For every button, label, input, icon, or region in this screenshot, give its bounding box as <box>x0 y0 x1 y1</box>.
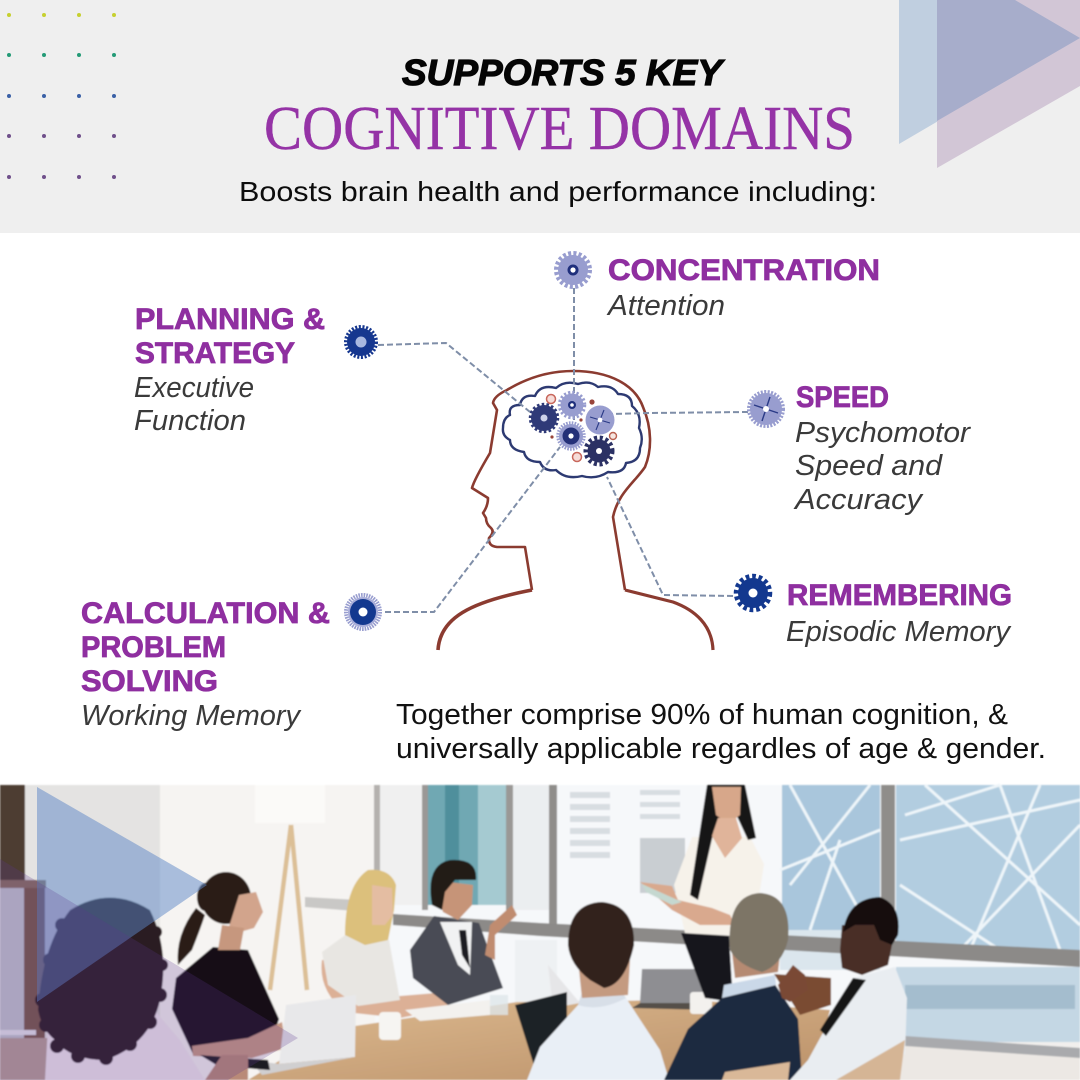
distant building windows <box>570 790 680 858</box>
man right: white shirt, tie <box>722 897 907 1080</box>
gear: speed <box>749 392 783 426</box>
summary text: universally applicable regardles of age & gender. <box>396 733 1046 765</box>
label: planning and strategy <box>134 303 325 437</box>
label: speed: Accuracy <box>793 484 924 516</box>
overlay triangle: purple <box>0 859 298 1080</box>
summary text <box>396 699 1046 765</box>
photo: business meeting <box>0 785 1080 1080</box>
label: speed <box>793 381 971 516</box>
brain gears <box>530 392 616 464</box>
woman two: black top <box>172 872 286 1058</box>
label: speed: SPEED <box>796 381 889 414</box>
woman one: curly hair <box>35 898 248 1080</box>
label: calculation and problem solving: PROBLEM <box>81 631 226 664</box>
window glass <box>375 785 1080 1025</box>
heading: supports 5 key: SUPPORTS 5 KEY <box>402 52 725 93</box>
man gray hair: navy jacket <box>664 893 802 1080</box>
lamp <box>255 785 325 823</box>
label: planning and strategy: Function <box>134 405 246 437</box>
label: speed: Speed and <box>795 450 943 482</box>
label: planning and strategy: Executive <box>134 372 254 404</box>
mullions <box>374 785 895 950</box>
label: concentration: CONCENTRATION <box>608 254 880 287</box>
label: concentration <box>606 254 880 322</box>
gear: remembering <box>736 576 770 610</box>
header panel <box>0 0 1080 233</box>
label: remembering: REMEMBERING <box>787 579 1012 612</box>
brain outline <box>503 383 642 477</box>
summary text: Together comprise 90% of human cognition, & <box>396 699 1008 731</box>
man back: white shirt <box>527 902 669 1080</box>
label: planning and strategy: STRATEGY <box>135 337 295 370</box>
label: calculation and problem solving <box>81 597 330 732</box>
glass facade lines <box>780 785 1080 950</box>
corner triangles <box>899 0 1080 168</box>
panel: head diagram <box>346 254 783 650</box>
gear: concentration <box>556 254 590 286</box>
overlay triangle: blue <box>37 787 207 1002</box>
table <box>248 1000 830 1080</box>
woman three: blonde <box>321 870 450 1018</box>
head outline <box>438 371 713 650</box>
label: speed: Psychomotor <box>795 417 971 449</box>
label: calculation and problem solving: CALCULATION & <box>81 597 330 630</box>
chair <box>774 974 831 1015</box>
label: calculation and problem solving: Working Memory <box>81 700 301 732</box>
man one: suit <box>410 860 517 1005</box>
table items: mug, laptop and papers <box>200 969 712 1075</box>
title: cognitive domains: COGNITIVE DOMAINS <box>264 95 855 163</box>
gear: planning <box>346 327 376 357</box>
dashed connectors <box>378 288 748 612</box>
presenter <box>640 785 764 1002</box>
gear: calculation <box>346 595 380 629</box>
label: calculation and problem solving: SOLVING <box>81 665 218 698</box>
label: planning and strategy: PLANNING & <box>135 303 325 336</box>
label: remembering <box>786 579 1012 648</box>
label: concentration: Attention <box>606 290 725 322</box>
subtitle: Boosts brain health and performance including: <box>239 176 877 207</box>
dot grid decoration <box>7 13 116 179</box>
label: remembering: Episodic Memory <box>786 616 1012 648</box>
wall sections <box>0 785 25 880</box>
